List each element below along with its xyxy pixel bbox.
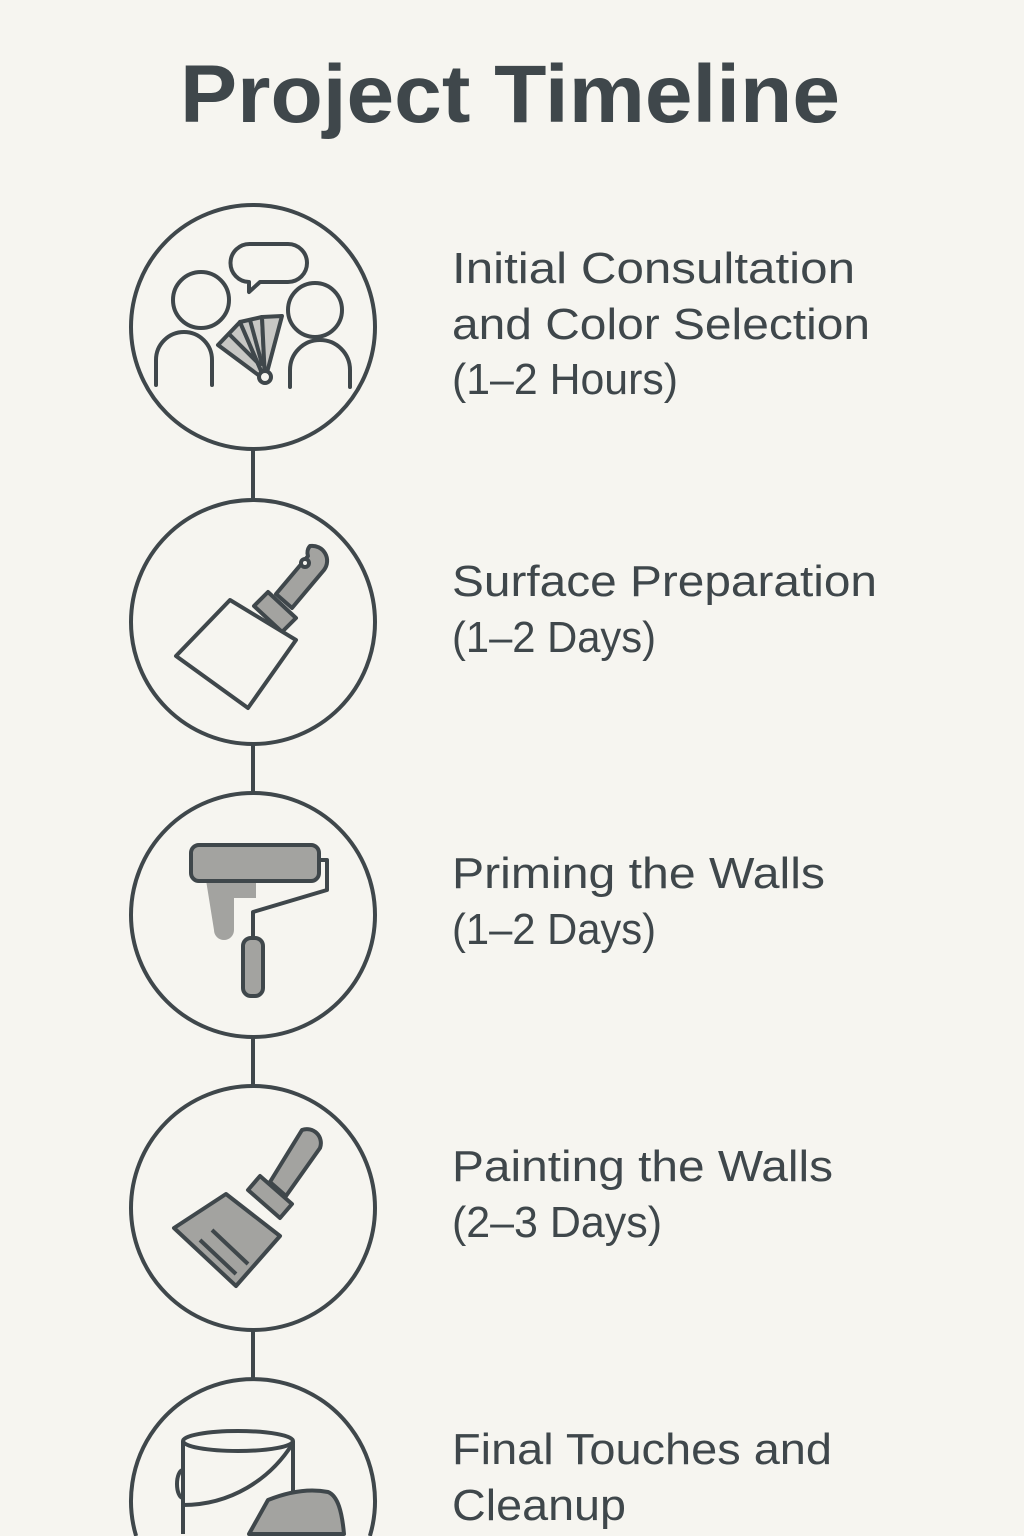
step 5 text: Final Touches and <box>452 1425 832 1474</box>
step 2 text: Surface Preparation <box>452 557 877 606</box>
step 4: painting <box>131 1086 375 1330</box>
icon: paint brush <box>174 1129 321 1286</box>
step 1 text: Initial Consultation <box>452 244 855 293</box>
step 4 text: (2–3 Days) <box>452 1198 662 1247</box>
step 2 text: (1–2 Days) <box>452 613 656 662</box>
step 4 text <box>452 1142 833 1247</box>
step 4 text: Painting the Walls <box>452 1142 833 1191</box>
step 1: consultation <box>131 205 375 449</box>
step 3 text <box>452 849 825 954</box>
step 1 text: (1–2 Hours) <box>452 355 678 404</box>
step 1 text: and Color Selection <box>452 300 870 349</box>
step 3 text: Priming the Walls <box>452 849 825 898</box>
icon: bucket and rag <box>177 1431 344 1534</box>
step 1 text <box>452 244 870 404</box>
icon: paint roller <box>191 845 327 996</box>
step 5 text: Cleanup <box>452 1481 626 1530</box>
step 3 text: (1–2 Days) <box>452 905 656 954</box>
connector lines <box>251 449 255 1379</box>
step 2: surface preparation <box>131 500 375 744</box>
icon: scraper <box>176 546 327 708</box>
title: Project Timeline <box>180 49 840 140</box>
step 5 text <box>452 1425 832 1530</box>
step 3: priming <box>131 793 375 1037</box>
step 2 text <box>452 557 877 662</box>
icon: people with speech bubble and swatches <box>156 244 350 387</box>
step 5: cleanup <box>131 1379 375 1536</box>
